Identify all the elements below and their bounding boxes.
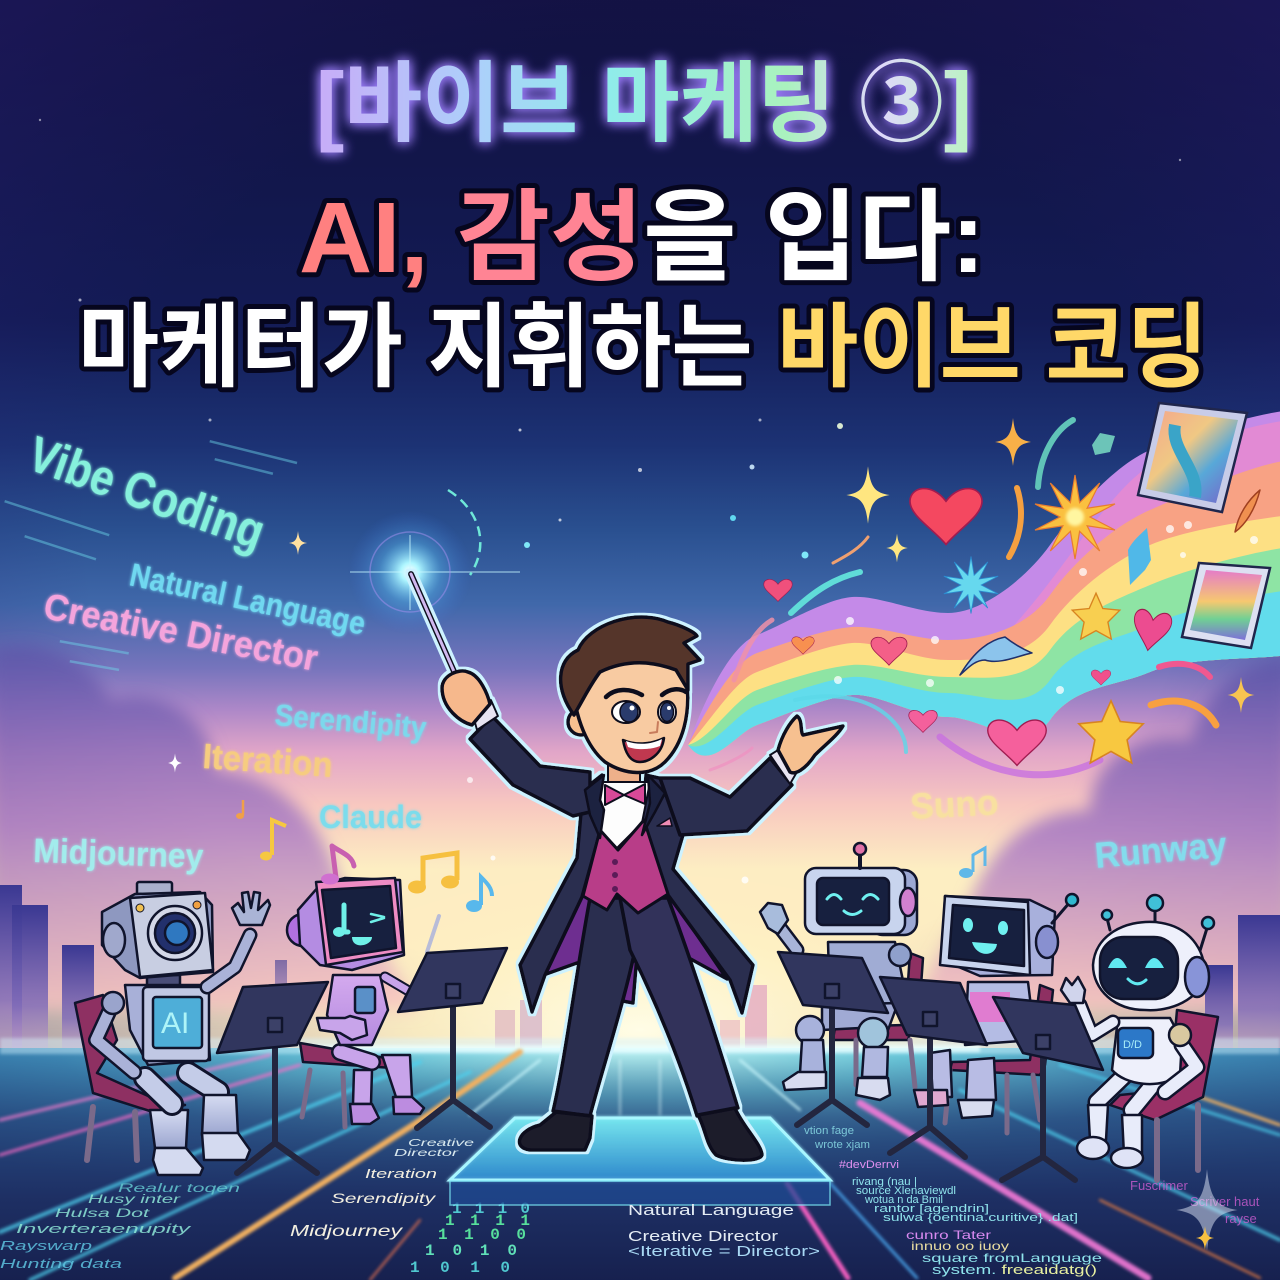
face: [572, 653, 688, 773]
chest label: D/D: [1123, 1039, 1142, 1051]
left leg: [340, 1052, 372, 1062]
floating code glyph rows: [4, 440, 297, 671]
left hand: [442, 671, 490, 725]
platform floor text: <Iterative = Director>: [628, 1244, 820, 1260]
left foot: [153, 1148, 203, 1175]
raised arm: [207, 935, 250, 987]
rainbow wisps: [710, 420, 1216, 775]
title line 1: [바이브 마케팅 ③]: [316, 54, 972, 153]
pocket square: [657, 818, 672, 826]
left leg: [553, 898, 640, 1116]
left arm: [96, 1003, 134, 1072]
ear: [1185, 957, 1209, 997]
word: Vibe Coding: Vibe Coding: [21, 426, 272, 560]
left sleeve: [470, 716, 590, 816]
music notes: [236, 800, 985, 912]
left leg: [1088, 1105, 1108, 1140]
floor code block right: cunro Tater: [906, 1228, 991, 1242]
right leg: [966, 1058, 996, 1100]
chair 5: [1110, 1010, 1218, 1120]
head side: [870, 870, 917, 935]
left thigh: [145, 1078, 172, 1104]
floor words: Director: [394, 1148, 459, 1159]
floor words: Serendipity: [331, 1190, 436, 1206]
screen: [1100, 937, 1178, 999]
hair: [561, 617, 700, 715]
chair 3 legs: [856, 1040, 915, 1087]
torso: [125, 985, 210, 1065]
arm and baton: [385, 977, 407, 990]
stars and sparkles: [168, 418, 1254, 1251]
pink note: [332, 846, 354, 878]
chair 5 legs: [1157, 1105, 1198, 1180]
right foot: [202, 1133, 250, 1160]
platform front: [450, 1181, 830, 1205]
eyebrows: [606, 689, 686, 697]
flare: [350, 535, 520, 610]
floor code block right: wotua n da Bmil: [864, 1194, 943, 1206]
floor words: Midjourney: [290, 1223, 403, 1240]
binary digits: 1 0 1 0: [410, 1259, 510, 1277]
chair 1 legs: [87, 1107, 137, 1160]
chair 2 legs: [302, 1070, 345, 1127]
picture frame 2: [1182, 563, 1270, 648]
chair 4: [950, 985, 1053, 1075]
chip: [1092, 433, 1115, 455]
music stand 5: [993, 997, 1103, 1180]
platform floor text: [628, 1202, 820, 1260]
title line 3: 마케터가 지휘하는 바이브 코딩: [78, 297, 1208, 399]
pink chest: [970, 992, 1010, 1022]
music stand 1: [217, 982, 328, 1173]
antenna: [1052, 902, 1070, 923]
binary digits: 1 1 1 1: [445, 1212, 530, 1230]
star field: [39, 119, 1181, 884]
platform floor text: Natural Language: [628, 1202, 794, 1219]
floor code text left: Inverteraenupity: [16, 1221, 193, 1236]
floor: [0, 1038, 1280, 1280]
word: Natural Language: Natural Language: [127, 557, 369, 642]
head: [1093, 922, 1205, 1010]
left foot: [350, 1104, 379, 1124]
coat right: [642, 775, 753, 1013]
robot 5: round head: [1061, 895, 1218, 1180]
arrow leaf: [1235, 490, 1260, 532]
chest icon: [355, 987, 375, 1013]
head front: [940, 896, 1030, 975]
chest screen: [1118, 1028, 1153, 1058]
lapel right: [642, 775, 665, 835]
robot 1: camera head: [75, 882, 270, 1175]
rainbow sparkles: [834, 521, 1258, 694]
left leg: [796, 1016, 824, 1044]
floor code block right: source Xlenaviewdl: [856, 1185, 956, 1197]
neck: [608, 755, 640, 782]
right thigh: [188, 1073, 218, 1092]
ear: [103, 923, 125, 957]
raised arm: [778, 925, 797, 950]
frame 1 art: [1146, 411, 1238, 503]
left cuff: [472, 700, 498, 730]
robot 3: monitor smile: [760, 843, 923, 1100]
floor code block right: wrote xjam: [814, 1139, 870, 1151]
right foot: [393, 1097, 424, 1114]
swirl arc: [448, 490, 480, 575]
mouth: [623, 738, 664, 762]
robot 2: monitor head: [287, 846, 439, 1127]
AI screen: [153, 997, 202, 1048]
face: [963, 918, 973, 932]
ear: [568, 709, 594, 735]
clouds left: [0, 646, 420, 1010]
head screen frame: [316, 878, 403, 965]
chair 2: [300, 1043, 397, 1068]
binary digits: 1 0 1 0: [425, 1242, 517, 1260]
left foot: [783, 1072, 826, 1090]
right side pink floor code: rayse: [1225, 1211, 1257, 1226]
head: [805, 868, 905, 934]
word: Suno: Suno: [909, 781, 999, 827]
folded hands: [317, 1016, 367, 1040]
right leg: [620, 898, 738, 1116]
floor code text left: Hunting data: [0, 1256, 122, 1271]
left shoe: [519, 1112, 592, 1150]
left leg: [150, 1110, 188, 1148]
floor code block right: [804, 1125, 1102, 1277]
word: Midjourney: Midjourney: [33, 832, 204, 876]
floor code block right: sulwa {oentina.curitive} .dat]: [883, 1212, 1078, 1224]
hearts: [764, 489, 1173, 765]
word: Claude: Claude: [319, 799, 422, 835]
torso: [327, 975, 388, 1045]
ear: [900, 888, 916, 916]
shirt: [600, 782, 650, 848]
left eye: [612, 701, 640, 723]
lapel left: [585, 775, 604, 838]
feet: [1077, 1137, 1109, 1159]
baton: [411, 574, 456, 676]
right shoe: [698, 1108, 762, 1160]
floor words: Creative: [408, 1138, 475, 1149]
music stand 2: [398, 948, 507, 1128]
torso: [828, 942, 908, 1010]
smile: [352, 937, 372, 945]
word: Runway: Runway: [1093, 824, 1228, 876]
glass platform: [450, 1118, 830, 1205]
feathers: [960, 433, 1260, 675]
right side pink floor code: [1130, 1178, 1260, 1226]
hips and thighs: [822, 1003, 898, 1030]
right foot: [856, 1078, 890, 1100]
chair 4 legs: [945, 1070, 1040, 1133]
floor code block right: vtion fage: [804, 1125, 854, 1137]
antennas: [1107, 905, 1208, 957]
vest buttons: [612, 859, 618, 892]
floor code text left: Husy inter: [88, 1192, 182, 1206]
horizon glow: [200, 840, 1080, 1220]
right leg: [1122, 1115, 1142, 1155]
wink eye: [371, 914, 384, 922]
word: Iteration: Iteration: [201, 737, 334, 785]
screen: [322, 886, 396, 958]
left arm: [1080, 1005, 1113, 1035]
floor code block right: rantor [agendrin]: [874, 1203, 989, 1215]
wand sparkle: [348, 490, 520, 634]
right sleeve: [660, 758, 792, 835]
neck: [147, 975, 180, 985]
floor code block right: innuo oo iuoy: [911, 1239, 1009, 1253]
torso: [965, 982, 1035, 1045]
word: Serendipity: Serendipity: [273, 697, 429, 745]
head side: [942, 896, 1055, 976]
note eye: [340, 905, 348, 932]
floor code text left: [0, 1181, 241, 1271]
face: [1108, 958, 1164, 968]
binary digits: [410, 1200, 530, 1277]
chair 3: [833, 953, 923, 1040]
rainbow swoosh: [688, 412, 1280, 756]
floor code block right: #devDerrvi: [839, 1159, 899, 1171]
word: Creative Director: Creative Director: [40, 586, 321, 679]
feather 2: [1128, 528, 1151, 585]
robot 4: monitor face: [914, 894, 1078, 1133]
picture frame 1: [1138, 403, 1247, 512]
clouds right: [910, 660, 1280, 1010]
right side pink floor code: Scriver haut: [1190, 1194, 1260, 1209]
title line 2: AI, 감성을 입다:: [299, 182, 985, 294]
platform floor text: Creative Director: [628, 1228, 778, 1245]
ear: [1036, 926, 1058, 958]
right leg: [382, 1055, 412, 1097]
right cuff: [770, 750, 797, 784]
right hand: [778, 716, 843, 773]
chair 1: [75, 995, 185, 1112]
floor code text left: Rayswarp: [0, 1238, 92, 1253]
right leg: [858, 1018, 888, 1048]
screen: [949, 905, 1024, 966]
floor light lines: [0, 1052, 1280, 1280]
antenna: [858, 852, 862, 868]
camera mount: [137, 882, 172, 896]
floor code text left: Hulsa Dot: [55, 1206, 150, 1220]
binary digits: 1 1 1 0: [452, 1200, 530, 1218]
floor code text left: Realur toqen: [118, 1181, 241, 1195]
coat lining: [538, 895, 727, 1003]
ear left: [287, 914, 319, 946]
left leg: [930, 1050, 952, 1097]
eye highlights: [630, 706, 671, 710]
right leg: [202, 1095, 238, 1135]
frame 2 art: [1190, 570, 1262, 640]
torso: [1112, 1018, 1182, 1084]
teeth: [626, 739, 662, 749]
city skyline: [0, 885, 1280, 1050]
ring: [370, 532, 450, 612]
music stand 3: [778, 952, 888, 1125]
face: [827, 894, 878, 914]
lens: [148, 906, 202, 960]
shoulder: [889, 944, 911, 966]
hand: [760, 903, 788, 934]
conductor: [411, 574, 843, 1160]
lamp dots: [136, 904, 144, 912]
music stand 4: [880, 977, 987, 1157]
head shell: [298, 878, 404, 970]
coat left: [520, 775, 602, 1012]
hand: [1061, 977, 1085, 1003]
screen: [817, 878, 889, 925]
bow tie: [605, 784, 645, 805]
raised hand: [232, 892, 270, 925]
right side pink floor code: Fuscrimer: [1130, 1178, 1188, 1193]
thighs: [1097, 1075, 1155, 1110]
floor code block right: rivang (nau |: [852, 1176, 917, 1188]
vest: [583, 820, 668, 913]
right arm: [1165, 1045, 1197, 1092]
binary digits: 1 1 0 0: [438, 1226, 526, 1244]
floor words: [290, 1138, 475, 1240]
AI chest label: AI: [161, 1007, 189, 1040]
right eye: [658, 701, 676, 723]
floor code block right: system. freeaidatg(): [932, 1262, 1097, 1277]
camera body: [102, 892, 213, 978]
floor code block right: square fromLanguage: [922, 1251, 1102, 1265]
frame 1 swirl: [1174, 425, 1196, 497]
floor words: Iteration: [365, 1166, 437, 1181]
nose: [650, 722, 658, 733]
